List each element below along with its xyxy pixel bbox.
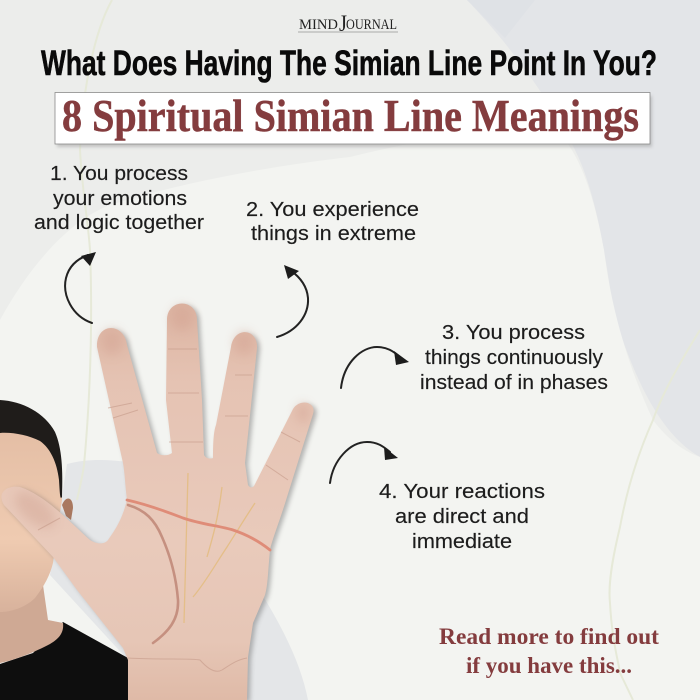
arrow 4 [330, 442, 398, 483]
shirt [0, 622, 128, 700]
arrow 3 [341, 347, 409, 388]
text: meaning 4 [379, 480, 545, 553]
neck [0, 585, 63, 663]
fate lines [184, 473, 255, 623]
text: meaning 2: things in extreme [251, 222, 416, 245]
person [0, 400, 128, 700]
hand shadow [4, 306, 317, 700]
text: meaning 1: your emotions [53, 187, 187, 210]
text: meaning 1: 1. You process [50, 162, 188, 185]
text: meaning 3: instead of in phases [420, 371, 608, 394]
fingertip tint [9, 305, 310, 535]
text: meaning 1: and logic together [34, 211, 204, 234]
arrow 1 [65, 252, 96, 323]
text: meaning 3: things continuously [425, 346, 604, 369]
call to action: Read more to find out [439, 624, 659, 649]
life line [128, 505, 178, 643]
text: meaning 4: immediate [412, 530, 512, 553]
hand [1, 304, 317, 700]
palm and fingers [1, 304, 314, 700]
hair [0, 400, 62, 498]
text: meaning 4: 4. Your reactions [379, 480, 545, 503]
logo: MindJournal [298, 11, 398, 36]
logo: MindJournal: J [339, 11, 347, 36]
logo: MindJournal: OURNAL [346, 17, 397, 33]
call to action [439, 624, 659, 678]
ear [62, 499, 73, 520]
text: meaning 1 [34, 162, 204, 234]
knuckle creases [38, 349, 300, 671]
arrow 2 [277, 265, 308, 337]
text: meaning 4: are direct and [395, 505, 529, 528]
text: meaning 2 [246, 198, 419, 245]
text: meaning 3: 3. You process [442, 321, 585, 344]
face [0, 430, 62, 612]
simian line [127, 500, 270, 550]
text: meaning 3 [420, 321, 608, 394]
call to action: if you have this... [466, 653, 632, 678]
text: meaning 2: 2. You experience [246, 198, 419, 221]
logo: MindJournal: MIND [299, 17, 338, 33]
